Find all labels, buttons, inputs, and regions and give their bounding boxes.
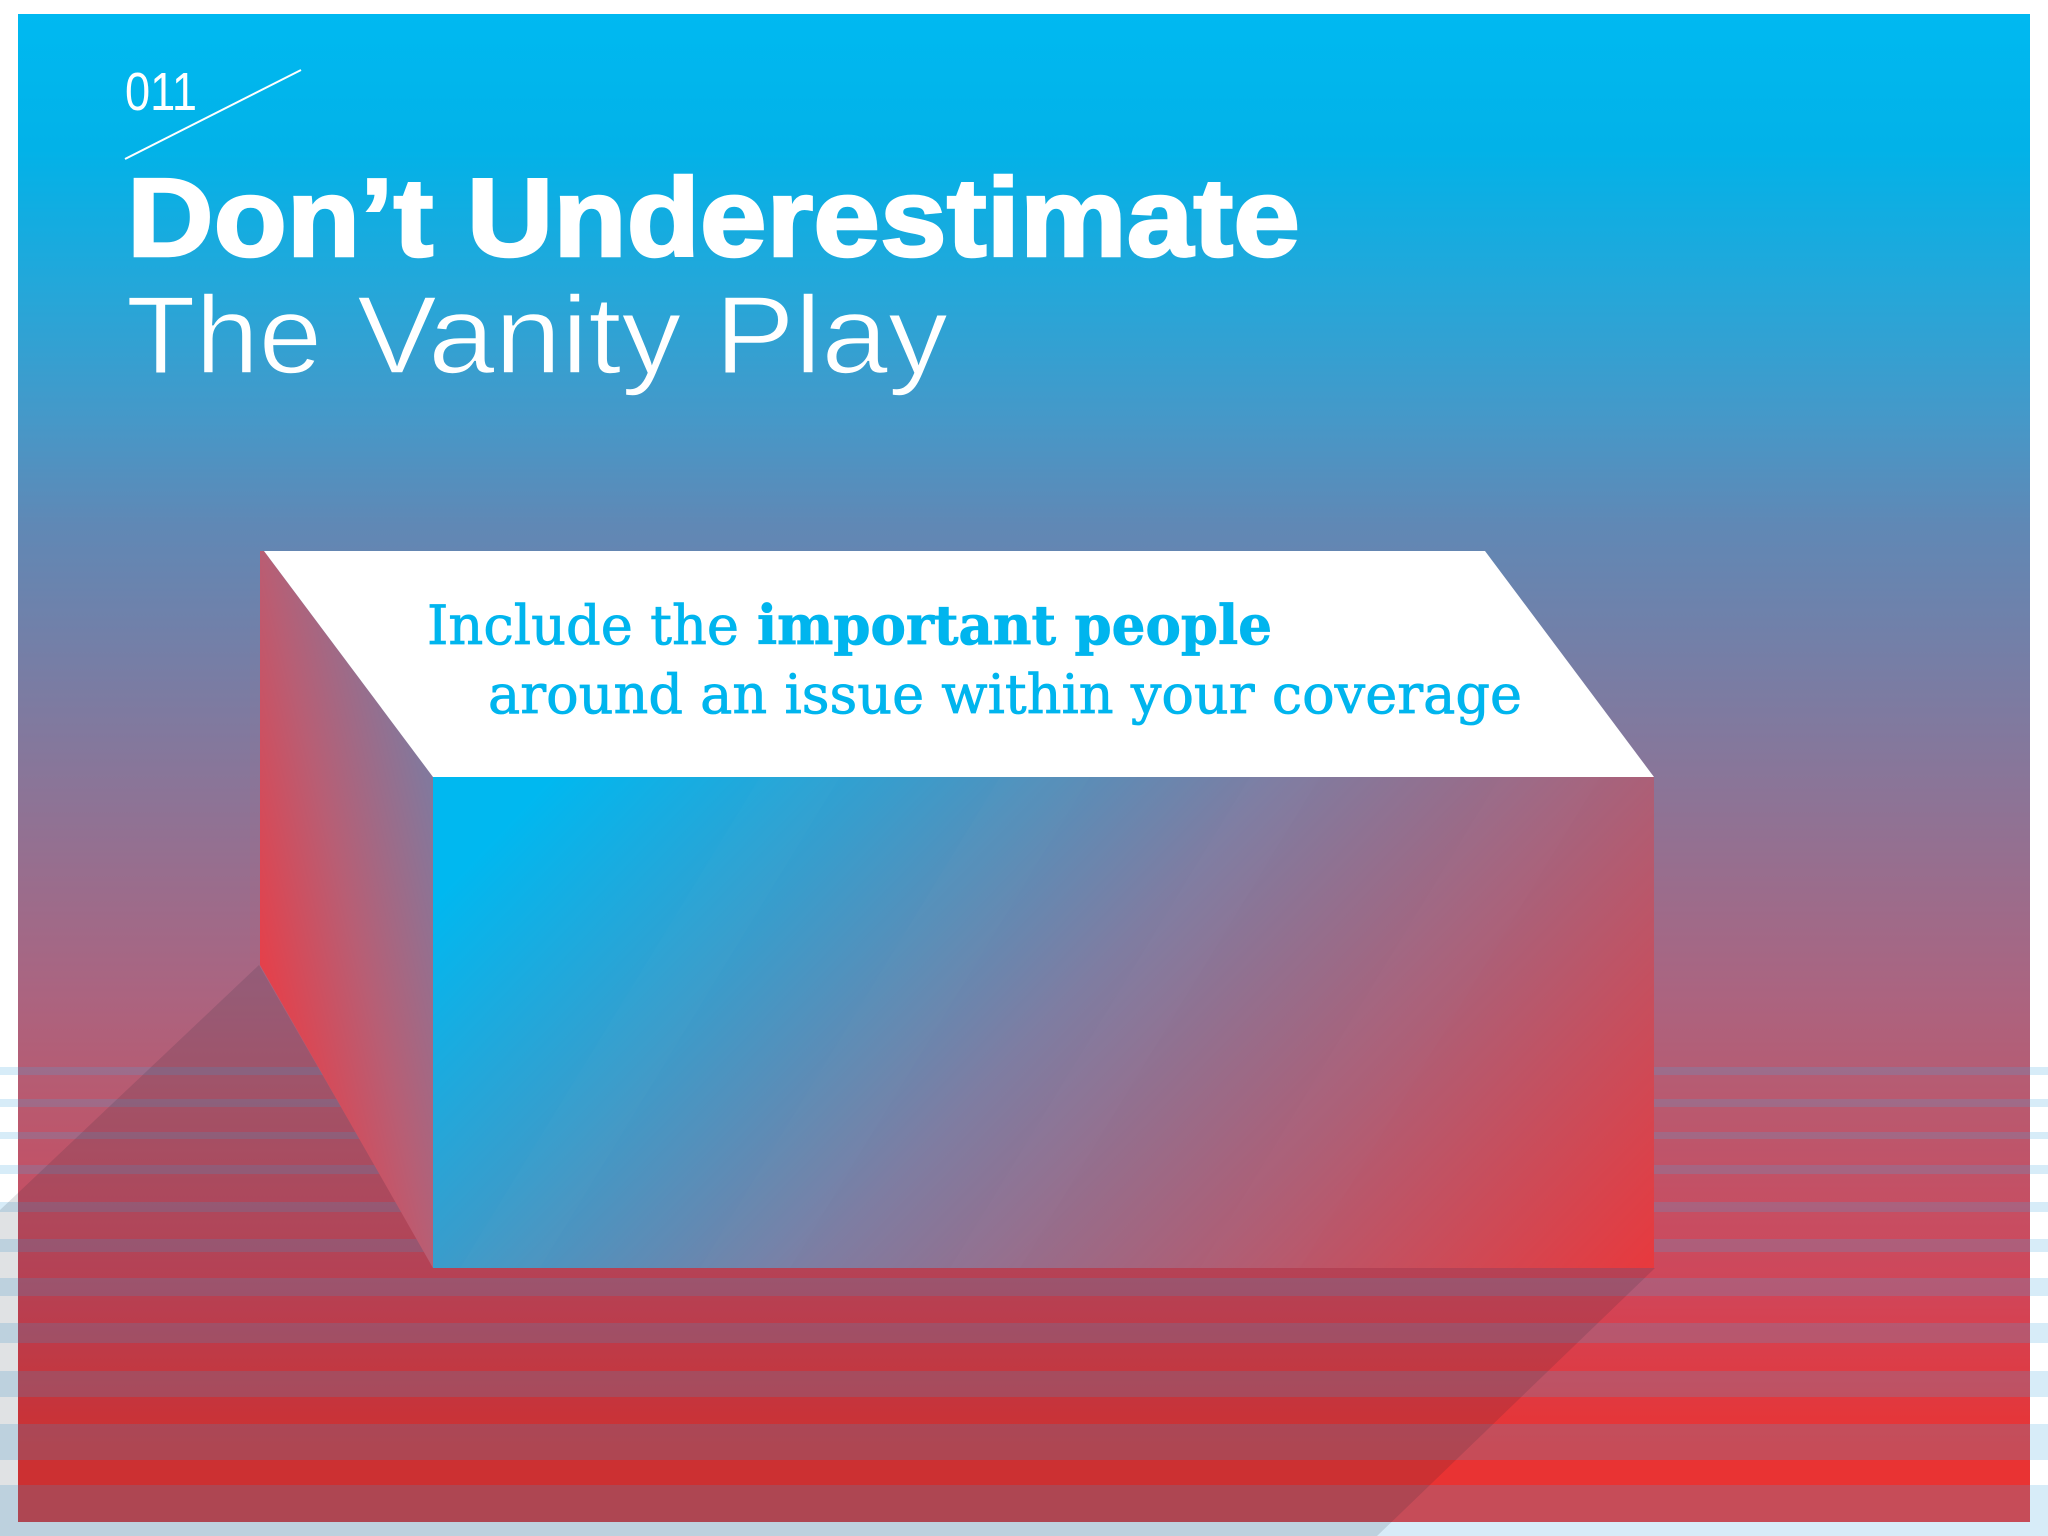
title light line: Vanity Play: [357, 274, 948, 397]
title: [126, 156, 1300, 397]
box top message text: Include the: [427, 594, 739, 657]
box top message text: around an issue within your coverage: [488, 663, 1522, 726]
box left side face: [260, 551, 433, 1268]
title bold line: Don’t Underestimate: [127, 156, 1300, 280]
box front face: [433, 777, 1654, 1268]
diagonal slash: [125, 70, 301, 159]
3D box: [260, 551, 1654, 1268]
box top message text: [427, 593, 1522, 726]
section number 011: 011: [125, 62, 197, 122]
title light line: [126, 274, 948, 397]
horizontal floor stripes: [0, 1067, 2048, 1536]
title light line: The: [126, 274, 322, 397]
box cast shadow: [0, 965, 1655, 1536]
box top face: [264, 551, 1654, 777]
box top message text: important people: [757, 593, 1272, 657]
